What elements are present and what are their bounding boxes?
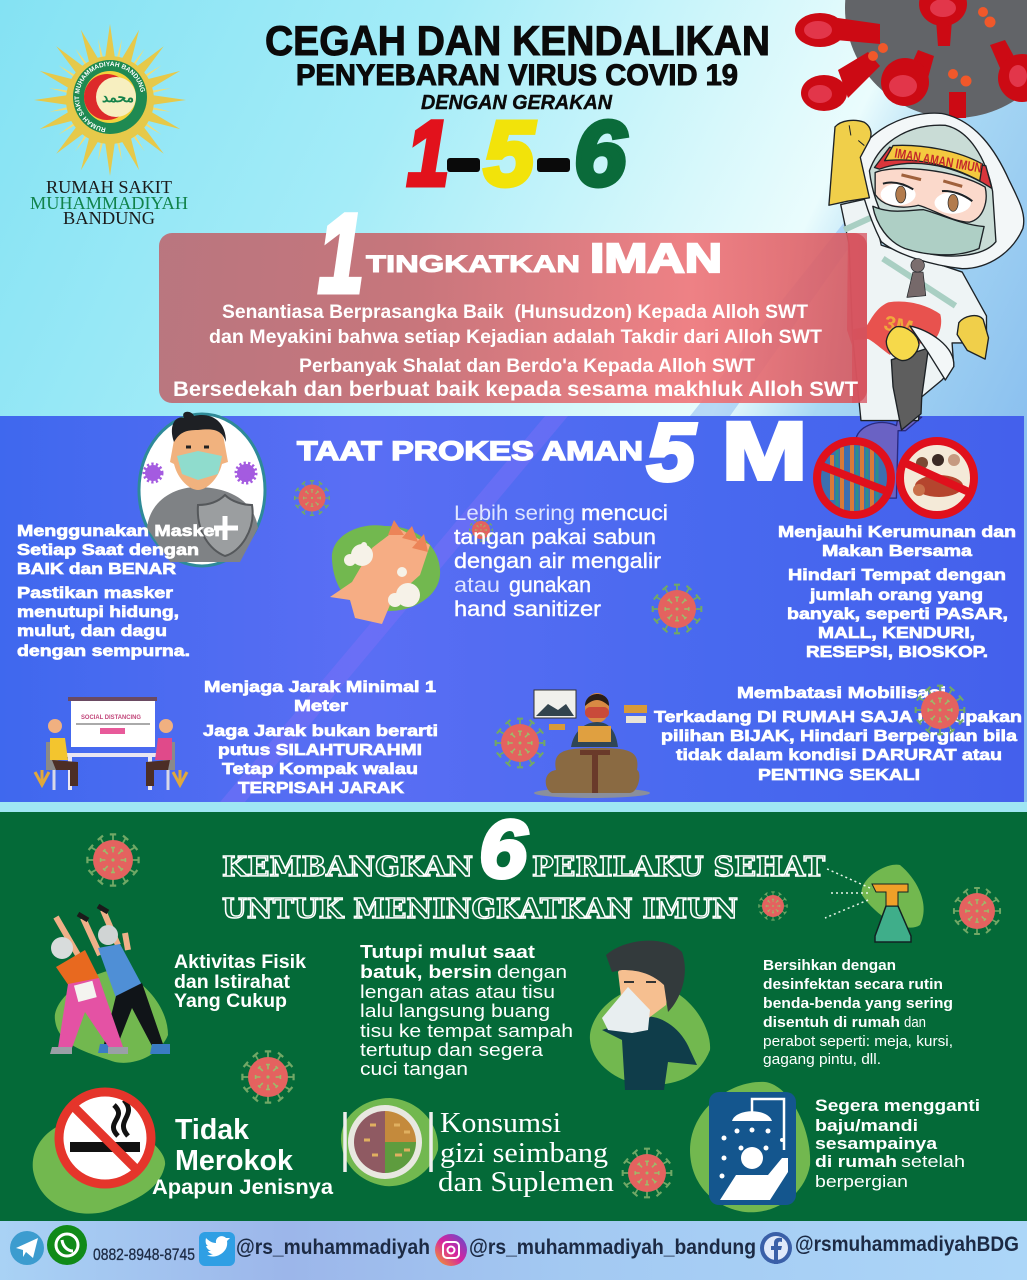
man <box>78 906 170 1054</box>
reading tablet <box>578 726 611 742</box>
text: menjauhi kerumunan <box>778 524 1016 661</box>
title <box>265 17 770 205</box>
icon: spray bottle <box>825 865 924 942</box>
food right bottom <box>385 1142 416 1173</box>
neck and face <box>170 425 228 490</box>
diagonal streak in sky <box>690 215 872 416</box>
handle instagram: @rs_muhammadiyah_bandung <box>469 1236 756 1259</box>
shower pipe <box>752 1099 784 1150</box>
shoulders <box>147 487 258 562</box>
stay safe sign <box>624 705 647 723</box>
home sign <box>549 724 565 730</box>
suit stripes <box>844 216 955 306</box>
character hood <box>856 113 1024 269</box>
sign face <box>57 1090 153 1186</box>
text: tutupi mulut: Tutupi mulut saat <box>360 942 535 962</box>
text: menjauhi kerumunan: Makan Bersama <box>822 543 972 560</box>
text: washing hands: Lebih sering <box>454 502 575 525</box>
headband with text <box>874 145 992 188</box>
shower head <box>732 1111 772 1121</box>
prohibition bar <box>819 465 889 492</box>
raised glove <box>829 120 871 205</box>
text: bersihkan: benda-benda yang sering <box>763 995 953 1012</box>
text: konsumsi gizi: Konsumsi <box>440 1108 561 1139</box>
text: segera mengganti: sesampainya <box>815 1134 938 1153</box>
icon: no eating together <box>900 441 974 515</box>
green blob <box>55 970 168 1063</box>
text: tutupi mulut: batuk, bersin <box>360 962 492 982</box>
text: washing hands: hand sanitizer <box>454 598 601 621</box>
1-5-6 numerals: 5 <box>484 103 536 205</box>
oval backdrop <box>139 414 265 566</box>
lower glove <box>957 316 989 359</box>
soap bubbles <box>344 542 420 607</box>
person body <box>571 722 618 747</box>
hand <box>330 528 430 624</box>
text: washing hands: tangan pakai sabun <box>454 526 656 549</box>
iman text: dan Meyakini bahwa setiap Kejadian adalah Takdir dari Alloh SWT <box>209 327 822 348</box>
text: konsumsi gizi: gizi seimbang <box>440 1138 608 1169</box>
sofa <box>546 748 639 793</box>
shield plus <box>214 516 238 540</box>
text: tutupi mulut: lengan atas atau tisu <box>360 982 555 1002</box>
icon: stay at home person on sofa <box>534 690 650 798</box>
red panel background <box>159 233 867 403</box>
text: segera mengganti <box>815 1096 980 1191</box>
green blob <box>862 865 924 928</box>
icon: balanced meal plate <box>341 1098 438 1186</box>
food left <box>354 1111 385 1173</box>
white knee <box>910 326 954 380</box>
icon: whatsapp <box>47 1225 87 1265</box>
text: aktivitas fisik <box>174 952 306 1012</box>
text: tidak merokok: Tidak <box>175 1114 250 1146</box>
inner hood <box>869 125 996 256</box>
numeral 5: 5 <box>647 407 696 498</box>
text: bersihkan: dan <box>904 1014 926 1031</box>
icon: facebook <box>760 1232 792 1264</box>
logo wordmark: RUMAH SAKIT <box>46 177 172 197</box>
hair <box>172 412 226 442</box>
text: masker: Setiap Saat dengan <box>17 542 199 559</box>
text: menjauhi kerumunan: Hindari Tempat dengan <box>788 567 1006 584</box>
tissue <box>602 987 650 1033</box>
text: bersihkan: perabot seperti: meja, kursi, <box>763 1033 953 1050</box>
iman text <box>173 302 858 401</box>
text: bersihkan: gagang pintu, dll. <box>763 1051 881 1068</box>
zipper ring <box>911 259 924 272</box>
person mask <box>585 707 609 718</box>
icon: social distancing <box>35 697 187 790</box>
yellow knee cap <box>886 327 919 361</box>
iman text: Bersedekah dan berbuat baik kepada sesama makhluk Alloh SWT <box>173 378 858 401</box>
text: segera mengganti: baju/mandi <box>815 1116 918 1135</box>
green blob <box>690 1082 810 1212</box>
text: konsumsi gizi: dan Suplemen <box>438 1167 614 1198</box>
text: menjauhi kerumunan: jumlah orang yang <box>809 587 983 604</box>
title line 1: CEGAH DAN KENDALIKAN <box>265 17 770 64</box>
fingers <box>388 520 428 552</box>
handle twitter: @rs_muhammadiyah <box>236 1236 430 1259</box>
text: tutupi mulut: tertutup dan segera <box>360 1040 544 1060</box>
logo wordmark: MUHAMMADIYAH <box>30 193 188 213</box>
food right top <box>385 1111 416 1142</box>
text: bersihkan: disentuh di rumah <box>763 1014 900 1031</box>
heading perilaku sehat: PERILAKU SEHAT <box>532 852 825 883</box>
trigger head <box>872 884 908 906</box>
text: masker: BAIK dan BENAR <box>17 561 177 578</box>
right person <box>146 719 175 790</box>
sign ring <box>59 1092 151 1184</box>
numeral 6: 6 <box>479 804 528 895</box>
icon: telegram <box>10 1231 44 1265</box>
dark trouser leg <box>891 348 928 430</box>
text: menjauhi kerumunan: RESEPSI, BIOSKOP. <box>806 644 988 661</box>
heading untuk meningkatkan imun: UNTUK MENINGKATKAN IMUN <box>222 894 738 925</box>
title line 3: DENGAN GERAKAN <box>421 92 613 114</box>
virus decorations green band <box>87 834 1000 1197</box>
glove finger creases <box>849 125 864 146</box>
icon: no crowd <box>817 441 891 515</box>
heading text: TAAT PROKES AMAN <box>297 436 643 466</box>
icon: shower <box>690 1082 810 1212</box>
food specks <box>364 1125 410 1155</box>
fork and spoon <box>345 1112 431 1172</box>
text: menjaga jarak: Jaga Jarak bukan berarti <box>203 723 438 740</box>
1-5-6 numerals: 6 <box>574 103 627 205</box>
logo wordmark <box>30 177 188 228</box>
eating group picture <box>903 444 971 512</box>
text: bersihkan <box>763 957 953 1068</box>
floor shadow <box>534 788 650 798</box>
logo wordmark: BANDUNG <box>63 208 155 228</box>
face mask <box>177 451 222 480</box>
text: aktivitas fisik: dan Istirahat <box>174 972 291 993</box>
footer contacts <box>10 1225 1019 1266</box>
sign bar <box>72 1105 138 1171</box>
green blob <box>590 985 710 1085</box>
heading kembangkan: KEMBANGKAN <box>222 852 473 883</box>
text: tutupi mulut: dengan <box>497 962 567 982</box>
green band heading <box>222 804 825 925</box>
headband with text: IMAN AMAN IMUN <box>894 146 983 176</box>
text: masker: mulut, dan dagu <box>17 623 167 640</box>
prohibition ring <box>900 441 974 515</box>
character face mask <box>873 206 984 255</box>
numeral 1: 1 <box>318 191 364 316</box>
panel: tingkatkan iman <box>159 191 867 403</box>
large coronavirus illustration <box>795 0 1027 118</box>
red pouch <box>853 302 941 355</box>
text: menjaga jarak: TERPISAH JARAK <box>238 780 405 797</box>
text: menjauhi kerumunan: MALL, KENDURI, <box>818 625 975 642</box>
icon: twitter <box>199 1232 235 1266</box>
logo calligraphy: محمد <box>102 89 134 105</box>
text: menjaga jarak: Meter <box>294 698 348 715</box>
cyan gap between bands <box>0 802 1027 812</box>
text: masker: Pastikan masker <box>17 585 173 602</box>
purple virus left <box>145 465 161 481</box>
footer bar <box>0 1221 1027 1280</box>
prohibition bar <box>903 462 971 493</box>
icon: instagram <box>435 1234 467 1266</box>
diagonal light streak <box>220 416 568 802</box>
purple virus right <box>237 464 255 482</box>
character goggles and eyes <box>875 169 986 222</box>
text: segera mengganti: setelah <box>901 1152 965 1171</box>
woman <box>50 917 128 1054</box>
eyes <box>186 446 209 448</box>
icon: masked person with shield <box>139 412 265 566</box>
text: membatasi mobilisasi <box>654 685 1022 784</box>
text: membatasi mobilisasi: Terkadang DI RUMAH SAJA merupakan <box>654 709 1022 726</box>
distance arrow <box>76 723 150 725</box>
text: washing hands: mencuci <box>581 502 668 525</box>
crowd picture <box>820 444 888 512</box>
phone number: 0882-8948-8745 <box>93 1245 195 1264</box>
letter M: M <box>722 406 807 497</box>
body <box>602 1017 697 1090</box>
meter tag <box>100 728 125 734</box>
text: washing hands: gunakan <box>509 574 591 597</box>
person body <box>720 1158 788 1200</box>
spray dots <box>825 868 870 918</box>
heading iman: IMAN <box>590 235 722 281</box>
character suit body <box>841 198 986 421</box>
water drops <box>720 1128 784 1178</box>
logo sunburst <box>34 24 186 176</box>
character boot and lower leg <box>856 417 922 498</box>
title line 2: PENYEBARAN VIRUS COVID 19 <box>296 59 738 92</box>
1-5-6 numerals <box>407 103 627 205</box>
blue band: taat prokes 5M <box>0 416 1024 802</box>
text: membatasi mobilisasi: tidak dalam kondisi DARURAT atau <box>676 747 1002 764</box>
text: tutupi mulut <box>360 942 573 1079</box>
plate <box>348 1105 422 1179</box>
band heading: taat prokes aman 5M <box>297 406 807 498</box>
text: membatasi mobilisasi: Membatasi Mobilisasi <box>737 685 946 702</box>
text: tidak merokok: Merokok <box>175 1145 294 1177</box>
virus over text <box>916 686 964 734</box>
text: washing hands <box>454 502 668 621</box>
text: tutupi mulut: cuci tangan <box>360 1059 468 1079</box>
red pouch: 3M <box>882 312 915 340</box>
text: menjaga jarak: Menjaga Jarak Minimal 1 <box>204 679 436 696</box>
text: washing hands: dengan air mengalir <box>454 550 661 573</box>
text: tidak merokok: Apapun Jenisnya <box>152 1176 333 1199</box>
text: menjaga jarak: Tetap Kompak walau <box>222 761 418 778</box>
text: masker: Menggunakan Masker <box>17 523 222 540</box>
icon: no smoking <box>33 1090 165 1214</box>
face <box>618 962 670 1020</box>
icon: sneezing man <box>590 941 710 1090</box>
heading tingkatkan: TINGKATKAN <box>366 251 580 278</box>
text: washing hands: atau <box>454 574 500 597</box>
plants <box>35 770 187 785</box>
text: menjaga jarak <box>203 679 438 797</box>
person head <box>741 1147 763 1169</box>
iman text: Perbanyak Shalat dan Berdo'a Kepada Alloh SWT <box>299 356 755 377</box>
iman text: Senantiasa Berprasangka Baik (Hunsudzon) Kepada Alloh SWT <box>222 302 808 323</box>
text: segera mengganti: berpergian <box>815 1172 908 1191</box>
shower tile <box>709 1092 796 1205</box>
logo crescent <box>84 71 136 123</box>
cheeks and closed eyes <box>624 981 656 983</box>
superhero character in protective suit <box>829 113 1024 498</box>
text: masker: dengan sempurna. <box>17 643 190 660</box>
tinted sleeve behind panel <box>847 233 867 403</box>
left person <box>46 719 78 790</box>
cigarette <box>70 1142 140 1152</box>
text: aktivitas fisik: Aktivitas Fisik <box>174 952 306 973</box>
green band: 6 perilaku sehat <box>0 812 1027 1221</box>
icon: exercising elderly couple <box>50 906 170 1063</box>
text: konsumsi gizi <box>438 1108 614 1198</box>
green blob <box>341 1098 438 1186</box>
text: menjaga jarak: putus SILAHTURAHMI <box>218 742 422 759</box>
picture frame <box>534 690 576 718</box>
1-5-6 numerals: 1 <box>407 103 449 205</box>
text: segera mengganti: Segera mengganti <box>815 1096 980 1115</box>
bottle <box>875 906 911 942</box>
person hair <box>585 694 609 706</box>
text: aktivitas fisik: Yang Cukup <box>174 991 287 1012</box>
whiteboard <box>68 697 157 747</box>
pedestal <box>580 750 610 793</box>
hair <box>606 941 685 1012</box>
icon: washing hands <box>330 520 440 624</box>
text: segera mengganti: di rumah <box>815 1152 897 1171</box>
text: membatasi mobilisasi: pilihan BIJAK, Hindari Berpergian bila <box>661 728 1017 745</box>
green blob <box>332 525 440 611</box>
text: bersihkan: Bersihkan dengan <box>763 957 896 974</box>
shield <box>198 495 253 556</box>
text: masker: menutupi hidung, <box>17 604 179 621</box>
text: masker <box>17 523 222 660</box>
logo: Rumah Sakit Muhammadiyah Bandung <box>30 24 188 228</box>
virus decorations blue band <box>295 481 701 767</box>
text: tutupi mulut: lalu langsung buang <box>360 1001 550 1021</box>
smoke <box>113 1100 129 1136</box>
text: menjauhi kerumunan: Menjauhi Kerumunan dan <box>778 524 1016 541</box>
text: tidak merokok <box>152 1114 333 1199</box>
desk <box>63 755 158 790</box>
logo emblem ring <box>73 60 147 134</box>
text: tutupi mulut: tisu ke tempat sampah <box>360 1021 573 1041</box>
person head <box>585 693 609 723</box>
logo ring text: RUMAH SAKIT MUHAMMADIYAH BANDUNG <box>74 62 145 132</box>
text: membatasi mobilisasi: PENTING SEKALI <box>758 767 920 784</box>
text: bersihkan: desinfektan secara rutin <box>763 976 943 993</box>
zipper pull <box>907 272 926 297</box>
green blob <box>33 1118 165 1214</box>
text: menjauhi kerumunan: banyak, seperti PASAR, <box>787 606 1008 623</box>
whiteboard label: SOCIAL DISTANCING <box>81 715 141 721</box>
prohibition ring <box>817 441 891 515</box>
